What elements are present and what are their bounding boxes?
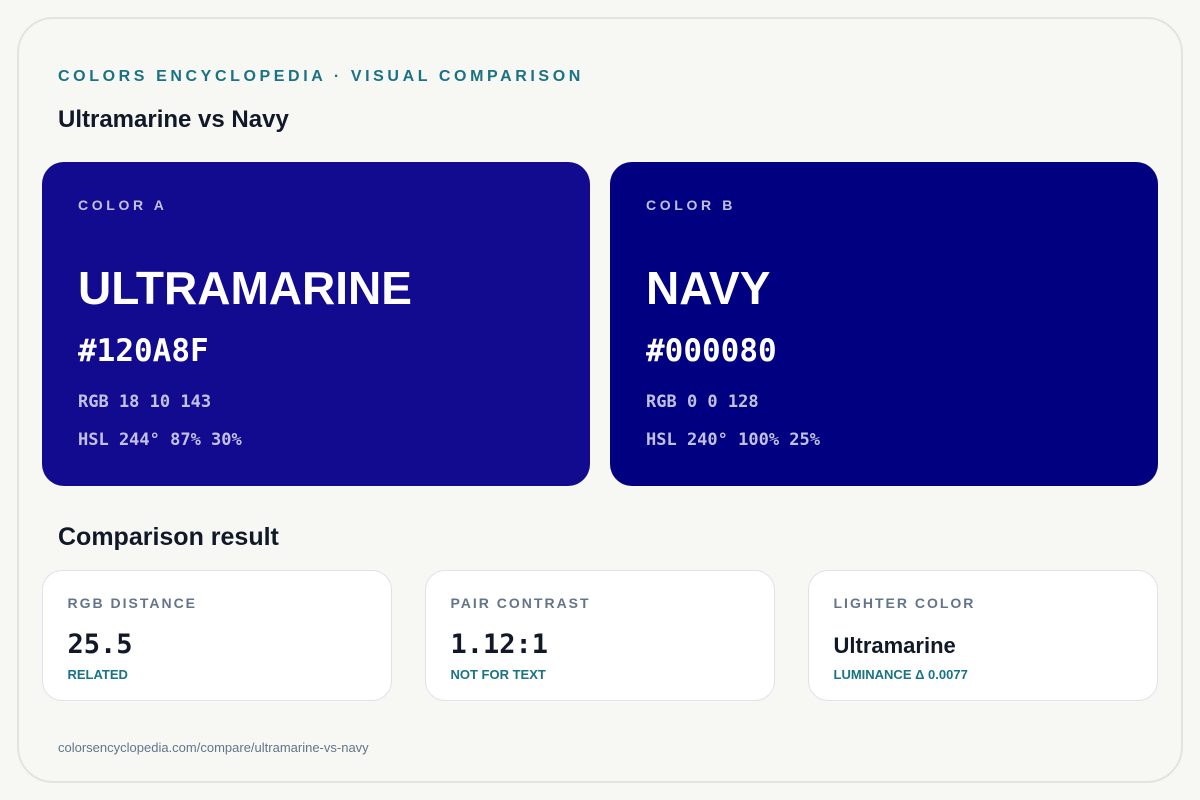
eyebrow heading: COLORS ENCYCLOPEDIA · VISUAL COMPARISON	[58, 68, 584, 85]
card value: Ultramarine	[834, 633, 956, 658]
card label: PAIR CONTRAST	[450, 595, 591, 611]
hex: ultramarine: #120A8F	[78, 333, 209, 369]
card label: RGB DISTANCE	[68, 595, 197, 611]
card value: 25.5	[68, 629, 133, 660]
footer source: colorsencyclopedia.com/compare/ultramarine-vs-navy	[58, 740, 369, 755]
card: lighter color	[808, 570, 1158, 701]
color name: ultramarine: ULTRAMARINE	[78, 262, 412, 314]
label: color A: COLOR A	[78, 197, 168, 213]
section heading: Comparison result	[58, 523, 279, 551]
card value: 1.12:1	[450, 629, 548, 660]
hsl: navy: HSL 240° 100% 25%	[646, 430, 820, 450]
hex: navy: #000080	[646, 333, 777, 369]
title: Ultramarine vs Navy	[58, 106, 289, 133]
card: RGB distance	[42, 570, 392, 701]
color name: navy: NAVY	[646, 262, 770, 314]
rgb: ultramarine: RGB 18 10 143	[78, 392, 211, 412]
label: color B: COLOR B	[646, 197, 736, 213]
card label: LIGHTER COLOR	[834, 595, 975, 611]
card note: LUMINANCE Δ 0.0077	[834, 667, 968, 682]
panel: color B	[610, 162, 1158, 486]
panel: color A	[42, 162, 590, 486]
rgb: navy: RGB 0 0 128	[646, 392, 759, 412]
card: pair contrast	[424, 570, 775, 701]
hsl: ultramarine: HSL 244° 87% 30%	[78, 430, 242, 450]
card note: NOT FOR TEXT	[450, 667, 546, 682]
card note: RELATED	[68, 667, 128, 682]
